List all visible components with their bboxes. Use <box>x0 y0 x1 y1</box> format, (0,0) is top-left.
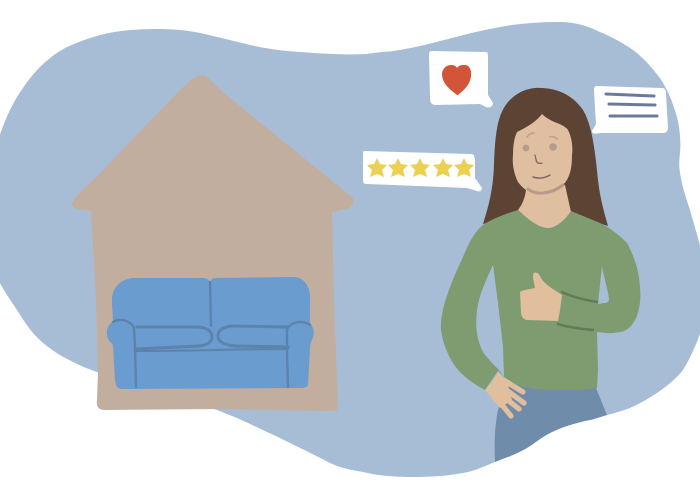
eyebrows, nose and mouth <box>527 133 557 178</box>
text bubble shape <box>592 86 668 134</box>
person <box>441 88 640 462</box>
jaw shadow <box>528 185 563 193</box>
speech bubble: text <box>592 86 668 134</box>
icon: heart <box>442 65 471 95</box>
sweater body and sleeves <box>441 210 640 390</box>
hand on hip <box>485 372 524 416</box>
speech bubble: heart <box>429 51 493 107</box>
right eye <box>549 143 557 151</box>
hair <box>483 88 608 226</box>
sofa <box>107 277 314 389</box>
hand thumbs up <box>520 272 562 321</box>
sofa seams <box>113 282 310 387</box>
gap under left arm <box>476 265 504 377</box>
heart bubble shape <box>429 51 493 107</box>
sleeve cuff lines <box>558 292 597 330</box>
house <box>72 75 354 411</box>
gap inside right arm <box>598 266 609 304</box>
neck <box>518 185 571 228</box>
face <box>513 114 572 195</box>
jeans <box>495 382 607 462</box>
stars bubble shape <box>363 151 482 191</box>
left eye <box>523 145 529 151</box>
sweater <box>441 210 640 390</box>
five stars <box>367 158 474 177</box>
speech bubble: stars <box>363 151 482 191</box>
sofa body <box>107 277 314 389</box>
text lines <box>606 94 657 116</box>
